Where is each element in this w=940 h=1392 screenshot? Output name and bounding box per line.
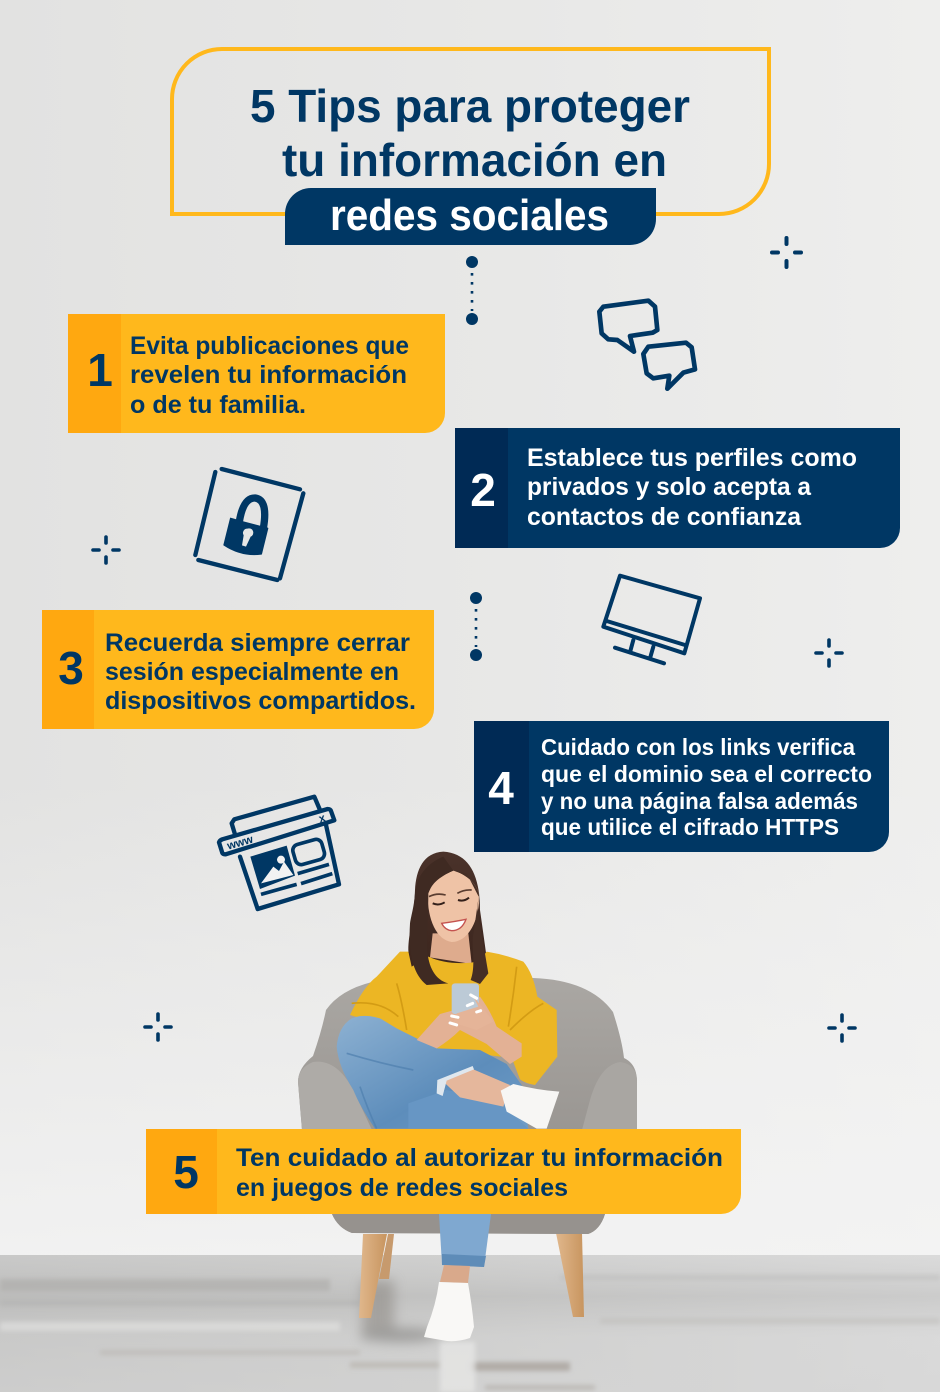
tip 3 text: sesión especialmente en xyxy=(105,658,399,686)
tip 4 text: que utilice el cifrado HTTPS xyxy=(541,814,839,840)
tip 2 card xyxy=(455,428,900,548)
tip 3 text: dispositivos compartidos. xyxy=(105,687,416,715)
face xyxy=(428,871,479,942)
tip 2 text: contactos de confianza xyxy=(527,503,802,531)
browser address text: www_ xyxy=(225,832,261,853)
sparkle top right xyxy=(772,238,801,267)
neck xyxy=(430,933,472,964)
sparkle middle right xyxy=(816,640,842,666)
icon: web browser page xyxy=(219,797,339,909)
shin xyxy=(443,1069,510,1107)
white nails xyxy=(450,995,481,1025)
tip 4 number: 4 xyxy=(488,762,514,814)
tip 4 text: Cuidado con los links verifica xyxy=(541,734,856,760)
title highlight pill xyxy=(285,188,656,245)
photo: woman on armchair xyxy=(298,852,637,1341)
tip 1 card xyxy=(68,314,445,433)
hair front xyxy=(410,857,453,985)
leg reflections xyxy=(360,1280,440,1342)
browser close mark: x xyxy=(318,812,328,826)
tip 2 text: Establece tus perfiles como xyxy=(527,444,857,472)
sparkle left xyxy=(93,537,119,563)
sparkle lower right xyxy=(829,1015,855,1041)
icon: chat bubbles xyxy=(599,301,695,389)
tip 1 text: Evita publicaciones que xyxy=(130,332,409,360)
tip 5 number: 5 xyxy=(173,1146,199,1198)
hair back xyxy=(408,852,489,987)
tip 3 text xyxy=(105,629,416,715)
background: floor xyxy=(0,1255,940,1392)
raised sneaker xyxy=(501,1084,559,1129)
title line 1: 5 Tips para proteger xyxy=(250,80,690,132)
tip 1 text xyxy=(130,332,409,419)
tip 4 text: y no una página falsa además xyxy=(541,788,858,814)
tip 5 text xyxy=(236,1144,723,1202)
icon: padlock xyxy=(195,469,303,580)
lower leg and sneaker xyxy=(424,1214,491,1341)
tip 5 text: en juegos de redes sociales xyxy=(236,1174,568,1202)
tip 2 text: privados y solo acepta a xyxy=(527,473,812,501)
title frame xyxy=(172,49,769,214)
phone xyxy=(452,983,479,1014)
title line 3: redes sociales xyxy=(330,191,609,240)
tip 3 card xyxy=(42,610,434,729)
tip 1 text: o de tu familia. xyxy=(130,391,306,419)
tip 5 text: Ten cuidado al autorizar tu información xyxy=(236,1144,723,1172)
tip 3 number: 3 xyxy=(58,642,84,694)
eyes and smile xyxy=(429,890,472,931)
connector dots middle xyxy=(470,592,482,661)
armchair xyxy=(298,978,637,1234)
sparkle lower left xyxy=(145,1014,171,1040)
tip 4 card xyxy=(474,721,889,852)
tip 1 number: 1 xyxy=(87,344,113,396)
title line 2: tu información en xyxy=(282,134,667,186)
sweater xyxy=(350,952,557,1085)
title xyxy=(250,80,690,245)
tip 5 card xyxy=(146,1129,741,1214)
hands xyxy=(417,997,522,1064)
tip 2 text xyxy=(527,444,857,531)
connector dots top xyxy=(466,256,478,325)
armchair legs xyxy=(359,1233,584,1318)
jeans xyxy=(337,1016,528,1129)
tip 1 text: revelen tu información xyxy=(130,361,407,389)
tip 4 text: que el dominio sea el correcto xyxy=(541,761,872,787)
tip 2 number: 2 xyxy=(470,464,496,516)
icon: computer monitor xyxy=(603,576,700,663)
tip 3 text: Recuerda siempre cerrar xyxy=(105,629,410,657)
tip 4 text xyxy=(541,734,872,840)
